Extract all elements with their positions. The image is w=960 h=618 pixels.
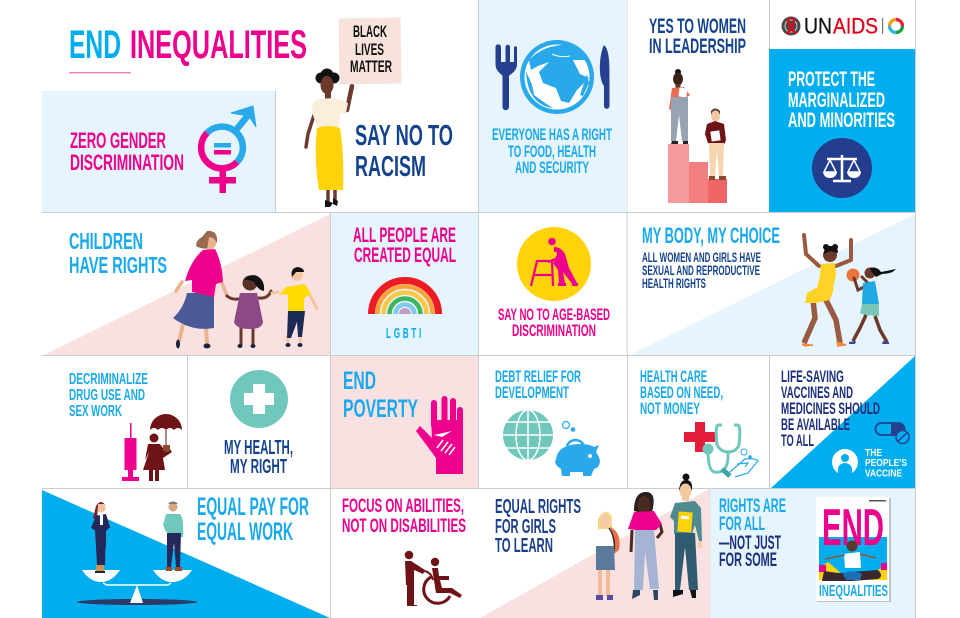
logo: the people's vaccine [832,447,907,480]
text: life-saving vaccines: TO ALL [781,431,814,450]
caption: age-based discrimination: DISCRIMINATION [512,321,596,340]
heading: decriminalize: DRUG USE AND [69,387,145,404]
placard: black lives matter: LIVES [355,40,384,59]
label: LGBTI: LGBTI [386,325,424,342]
panel: age-based discrimination [498,227,610,340]
heading: equal rights for girls [495,495,581,557]
panel: decriminalize drug use [69,371,182,481]
heading: abilities: FOCUS ON ABILITIES, [342,496,464,517]
icon: red cross [684,422,715,452]
placard: black lives matter: BLACK [353,22,387,41]
logo: UNAIDS: UN [804,14,832,38]
icon: helping hand [416,399,463,474]
heading: debt relief: DEBT RELIEF FOR [495,368,581,386]
caption: age-based discrimination: SAY NO TO AGE-BASED [498,305,610,324]
illustration: balance scale [77,570,197,605]
panel: all people are created equal [331,213,478,355]
text: reproductive rights: SEXUAL AND REPRODUCTIVE [642,263,760,278]
heading: children have rights: CHILDREN [69,228,143,254]
heading: health care [640,368,723,418]
illustration: woman leader [669,69,690,144]
heading: say no to racism: SAY NO TO [355,120,453,152]
heading: say no to racism [355,120,453,183]
panel: my health, my right [224,370,293,478]
icon: medical cross [230,370,288,428]
panel: my body, my choice [630,214,915,355]
icon: wheelchair with helper [405,551,462,606]
illustration: blonde girl [596,511,620,600]
heading: end poverty [343,367,418,423]
icon: globe grid [503,410,553,460]
illustration: man leader [705,108,726,180]
text: life-saving vaccines: VACCINES AND [781,383,853,402]
panel: health care based on need [640,368,758,477]
heading: rights are for all: FOR SOME [719,549,777,571]
icon: gender symbol [201,106,256,193]
text: life-saving vaccines: BE AVAILABLE [781,415,850,434]
heading: abilities [342,496,466,537]
heading: children have rights: HAVE RIGHTS [69,252,167,278]
heading: equal pay: EQUAL WORK [197,518,293,546]
heading: protect the marginalized: MARGINALIZED [788,89,885,112]
caption: age-based discrimination [498,305,610,340]
illustration: dark-haired girl [628,492,662,600]
illustration: tall woman with book [670,474,702,598]
heading: protect the marginalized: PROTECT THE [788,68,875,91]
title: INEQUALITIES [130,23,307,67]
caption: my health: MY HEALTH, [224,437,293,459]
panel: children have rights [44,214,330,355]
icon: syringe [122,423,139,481]
text: life-saving vaccines: LIFE-SAVING [781,367,844,386]
heading: equal rights for girls: EQUAL RIGHTS [495,495,581,518]
illustration: mother and children [173,231,317,348]
heading: all people created equal: ALL PEOPLE ARE [353,224,456,247]
icon: scales of justice [812,138,872,198]
text: reproductive rights: HEALTH RIGHTS [642,276,706,291]
panel: protect the marginalized [769,49,915,212]
heading: say no to racism: RACISM [355,151,426,183]
icon: woman with umbrella [143,414,182,481]
title [69,23,307,73]
heading: all people created equal: CREATED EQUAL [354,244,456,267]
heading: rights are for all: —NOT JUST [719,532,781,554]
heading: yes to women [649,15,746,58]
heading: equal pay [197,493,309,546]
heading: yes to women: YES TO WOMEN [649,15,746,38]
text: reproductive rights: ALL WOMEN AND GIRLS HAVE [642,250,761,265]
heading: equal rights for girls: TO LEARN [495,534,553,557]
heading: abilities: NOT ON DISABILITIES [342,516,466,537]
book cover: end inequalities: INEQUALITIES [819,583,888,600]
caption: right to food: EVERYONE HAS A RIGHT [492,125,612,144]
panel: equal rights for girls [480,474,709,618]
panel: rights are for all [711,489,915,618]
panel: equal pay [42,490,330,618]
heading: end poverty: END [343,367,376,395]
illustration: protester with sign [306,68,352,207]
logo: UNAIDS [782,14,902,38]
panel: women in leadership [649,15,746,203]
illustration: woman on scale [91,502,110,573]
heading: equal rights for girls: FOR GIRLS [495,515,556,538]
logo: UNAIDS: AIDS [833,14,878,38]
text: life-saving vaccines [781,367,880,450]
panel: debt relief [495,368,600,476]
icon: knife [600,45,610,109]
icon: fork [496,44,517,110]
placard: black lives matter: MATTER [350,57,392,76]
heading: protect the marginalized [788,68,895,132]
icon: rainbow [372,280,438,314]
heading: health care: NOT MONEY [640,400,700,418]
heading: debt relief [495,368,581,402]
title: END [69,23,121,67]
panel: abilities [342,496,466,606]
logo: the people's vaccine: THE [865,447,882,459]
caption: right to food: AND SECURITY [515,158,589,177]
panel: life-saving vaccines [771,356,915,488]
caption: my health [224,437,293,478]
placard: black lives matter [338,17,402,85]
heading: children have rights [69,228,167,278]
heading: yes to women: IN LEADERSHIP [649,35,746,58]
heading: health care: BASED ON NEED, [640,384,723,402]
icon: piggy bank [555,422,600,476]
heading: end poverty: POVERTY [343,395,418,423]
book cover: end inequalities [816,497,891,602]
icon: stethoscope and hand [704,425,758,477]
heading: rights are for all: RIGHTS ARE [719,495,786,517]
logo: the people's vaccine: PEOPLE'S [865,457,907,469]
heading: decriminalize: SEX WORK [69,403,122,420]
heading: rights are for all: FOR ALL [719,513,765,535]
book cover: end inequalities: END [822,499,884,557]
panel: end poverty [331,356,478,488]
heading: decriminalize: DECRIMINALIZE [69,371,148,388]
icon: elder with walker [517,227,591,301]
chart: podium steps [668,144,727,203]
text: life-saving vaccines: MEDICINES SHOULD [781,399,880,418]
heading: equal pay: EQUAL PAY FOR [197,493,309,521]
caption: right to food [492,125,612,177]
heading: rights are for all [719,495,786,571]
text: reproductive rights [642,250,761,291]
heading: health care: HEALTH CARE [640,368,707,386]
heading: zero gender [70,128,184,175]
panel: right to food [479,0,627,212]
heading: protect the marginalized: AND MINORITIES [788,109,895,132]
heading: zero gender: ZERO GENDER [70,128,166,153]
illustration: man on scale [163,502,183,571]
panel: zero gender discrimination [42,91,275,212]
heading: all people created equal [353,224,456,267]
logo: the people's vaccine: VACCINE [865,468,902,480]
panel: say no to racism [306,17,453,207]
heading: my body, my choice: MY BODY, MY CHOICE [642,223,780,248]
icon: capsule [876,423,909,444]
heading: zero gender: DISCRIMINATION [70,150,184,175]
illustration: woman and girl with ball [802,235,896,346]
icon: globe [520,40,594,114]
heading: debt relief: DEVELOPMENT [495,384,569,402]
heading: decriminalize [69,371,148,420]
caption: my health: MY RIGHT [230,456,287,478]
caption: right to food: TO FOOD, HEALTH [508,142,596,161]
